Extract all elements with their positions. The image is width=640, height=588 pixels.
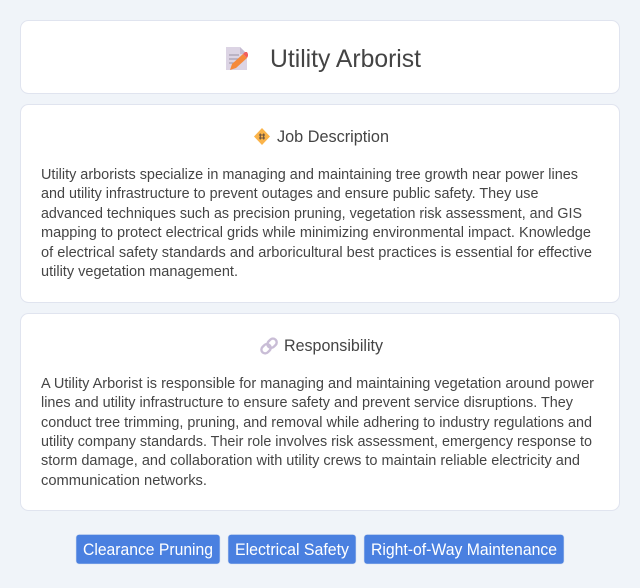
- tag: right-of-way maintenance: Right-of-Way Maintenance: [371, 540, 557, 559]
- tag: clearance pruning: [76, 534, 220, 564]
- text block: job description: Utility arborists specialize in managing and maintaining tree growth near power lines: [41, 167, 578, 183]
- text block: responsibility: A Utility Arborist is responsible for managing and maintaining vegetation around power: [41, 376, 594, 392]
- text block: responsibility: conduct tree trimming, pruning, and removal while adhering to industry regulations and: [41, 415, 592, 431]
- text block: job description: utility vegetation management.: [41, 264, 238, 280]
- tag: right-of-way maintenance: [364, 534, 564, 564]
- icon: chain link: [260, 337, 278, 355]
- text block: responsibility: storm damage, and collaboration with utility crews to maintain reliable electricity and: [41, 453, 580, 469]
- text block: job description: mapping to protect electrical grids while minimizing environmental impact. Knowledge: [41, 225, 591, 241]
- tag: clearance pruning: Clearance Pruning: [83, 540, 213, 559]
- text block: responsibility: [41, 376, 594, 489]
- text block: job description: [41, 167, 592, 280]
- text block: job description: of electrical safety standards and arboricultural best practices is essential for effective: [41, 245, 592, 261]
- tag: electrical safety: Electrical Safety: [235, 540, 350, 559]
- text block: job description: advanced techniques such as precision pruning, vegetation risk assessment, and GIS: [41, 206, 582, 222]
- heading: responsibility: Responsibility: [284, 336, 384, 355]
- icon: diamond road sign: [254, 128, 270, 145]
- skill tags: [76, 534, 564, 564]
- heading: job description: Job Description: [277, 127, 389, 146]
- panel: header: [20, 20, 620, 94]
- tag: electrical safety: [228, 534, 356, 564]
- text block: job description: and utility infrastructure to prevent outages and ensure public safety. They use: [41, 186, 538, 202]
- panel: job description: [20, 104, 620, 302]
- text block: responsibility: lines and utility infrastructure to ensure safety and prevent service disruptions. They: [41, 395, 574, 411]
- title: Utility Arborist: [270, 45, 421, 73]
- text block: responsibility: utility company standards. Their role involves risk assessment, emergency response to: [41, 434, 592, 450]
- icon: document with pencil: [226, 47, 248, 70]
- panel: responsibility: [20, 314, 620, 510]
- text block: responsibility: communication networks.: [41, 473, 207, 489]
